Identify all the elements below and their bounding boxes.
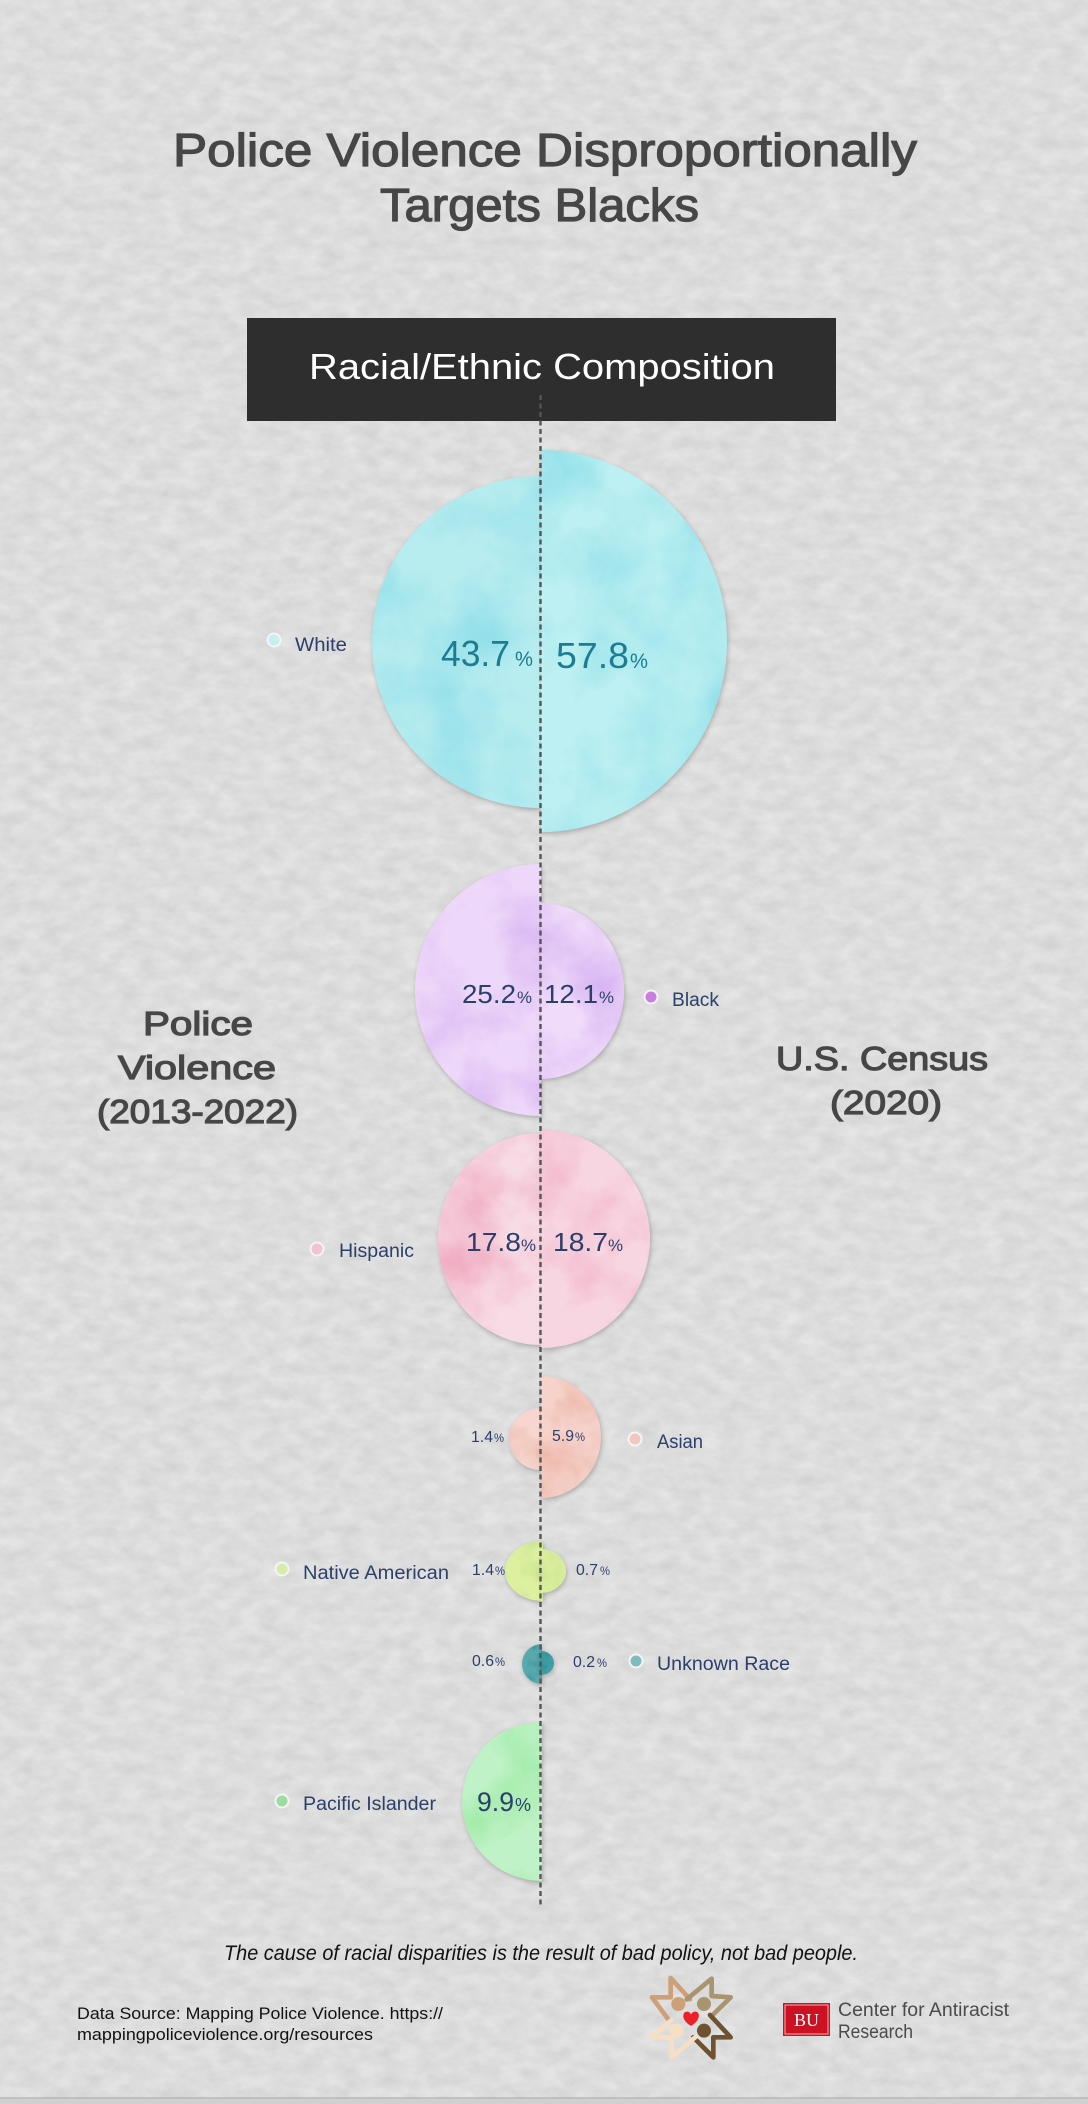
organization name: [838, 2000, 1010, 2043]
value: Asian police violence 1.4%: %: [494, 1431, 504, 1445]
legend: Black: Black: [672, 990, 719, 1011]
legend: Native American: Native American: [303, 1563, 449, 1584]
side label: Police Violence (2013-2022): [97, 1005, 298, 1130]
title: Police Violence Disproportionally: [173, 124, 917, 176]
legend: Asian: Asian: [657, 1432, 703, 1453]
value: Pacific Islander police violence 9.9%: %: [515, 1795, 531, 1815]
side label: Police Violence (2013-2022): (2013-2022): [97, 1093, 298, 1130]
value: Unknown Race census 0.2%: 0.2: [573, 1654, 595, 1671]
value: White census 57.8%: %: [630, 650, 648, 673]
data source: Data Source: Mapping Police Violence. https://: [77, 2004, 443, 2023]
value: Asian census 5.9%: [552, 1428, 585, 1445]
side label: Police Violence (2013-2022): Violence: [118, 1049, 276, 1086]
bubble pair: Unknown Race: [522, 1644, 554, 1684]
value: Black police violence 25.2%: %: [517, 988, 532, 1007]
legend: Pacific Islander: Pacific Islander: [303, 1794, 437, 1815]
value: White police violence 43.7%: %: [515, 648, 533, 671]
data source: [77, 2004, 443, 2044]
value: Asian census 5.9%: 5.9: [552, 1428, 574, 1445]
title: Targets Blacks: [380, 179, 699, 231]
value: Asian police violence 1.4%: 1.4: [471, 1429, 493, 1446]
banner: Racial/Ethnic Composition: Racial/Ethnic Composition: [309, 346, 775, 387]
value: Native American census 0.7%: 0.7: [576, 1562, 598, 1579]
legend: Unknown Race: Unknown Race: [657, 1654, 790, 1675]
organization name: Research: [838, 2022, 913, 2043]
value: Native American police violence 1.4%: %: [495, 1564, 505, 1578]
value: Black census 12.1%: %: [599, 988, 614, 1007]
bubble: Pacific Islander: [462, 1722, 542, 1881]
value: Hispanic police violence 17.8%: 17.8: [466, 1227, 521, 1257]
value: Pacific Islander police violence 9.9%: 9.9: [477, 1787, 514, 1817]
value: Unknown Race police violence 0.6%: [472, 1653, 505, 1670]
tagline: The cause of racial disparities is the result of bad policy, not bad people.: [224, 1942, 858, 1965]
title: [173, 124, 917, 231]
value: Black police violence 25.2%: 25.2: [462, 979, 516, 1009]
value: Unknown Race police violence 0.6%: 0.6: [472, 1653, 494, 1670]
icon: BU logo: BU: [794, 2010, 819, 2030]
legend: Hispanic: Hispanic: [339, 1241, 414, 1262]
icon: BU logo: [783, 2003, 830, 2036]
value: Native American census 0.7%: [576, 1562, 610, 1579]
value: Native American police violence 1.4%: 1.4: [472, 1562, 494, 1579]
side label: U.S. Census (2020): U.S. Census: [776, 1040, 988, 1077]
bubble pair: Black: [415, 864, 624, 1116]
legend: White: White: [295, 635, 347, 656]
value: Hispanic census 18.7%: %: [608, 1236, 623, 1255]
side label: Police Violence (2013-2022): Police: [143, 1005, 253, 1042]
side label: U.S. Census (2020): [776, 1040, 988, 1121]
value: Asian police violence 1.4%: [471, 1429, 504, 1446]
bubble pair: Hispanic: [438, 1130, 650, 1348]
icon: antiracist star logo: [651, 1978, 731, 2057]
organization name: Center for Antiracist: [838, 2000, 1010, 2021]
value: Pacific Islander police violence 9.9%: [477, 1787, 531, 1817]
value: Native American census 0.7%: %: [600, 1564, 610, 1578]
value: White census 57.8%: 57.8: [556, 635, 629, 676]
side label: U.S. Census (2020): (2020): [830, 1084, 942, 1121]
value: Unknown Race census 0.2%: %: [597, 1656, 607, 1670]
bubble pair: Native American: [505, 1541, 566, 1601]
value: Asian census 5.9%: %: [575, 1430, 585, 1444]
legend: White: [268, 634, 347, 656]
value: White police violence 43.7%: 43.7: [441, 633, 510, 674]
value: Unknown Race police violence 0.6%: %: [495, 1655, 505, 1669]
center dashed divider: [539, 395, 542, 1907]
data source: mappingpoliceviolence.org/resources: [77, 2025, 373, 2044]
legend: Black: [644, 990, 719, 1011]
value: Black census 12.1%: 12.1: [544, 979, 598, 1009]
value: Hispanic census 18.7%: 18.7: [553, 1227, 608, 1257]
legend: Asian: [628, 1432, 703, 1453]
banner: Racial/Ethnic Composition: [247, 318, 836, 421]
value: Unknown Race census 0.2%: [573, 1654, 607, 1671]
bubble pair: White: [372, 450, 727, 832]
value: Native American police violence 1.4%: [472, 1562, 505, 1579]
value: Hispanic police violence 17.8%: %: [521, 1236, 536, 1255]
bubble pair: Asian: [509, 1376, 601, 1498]
